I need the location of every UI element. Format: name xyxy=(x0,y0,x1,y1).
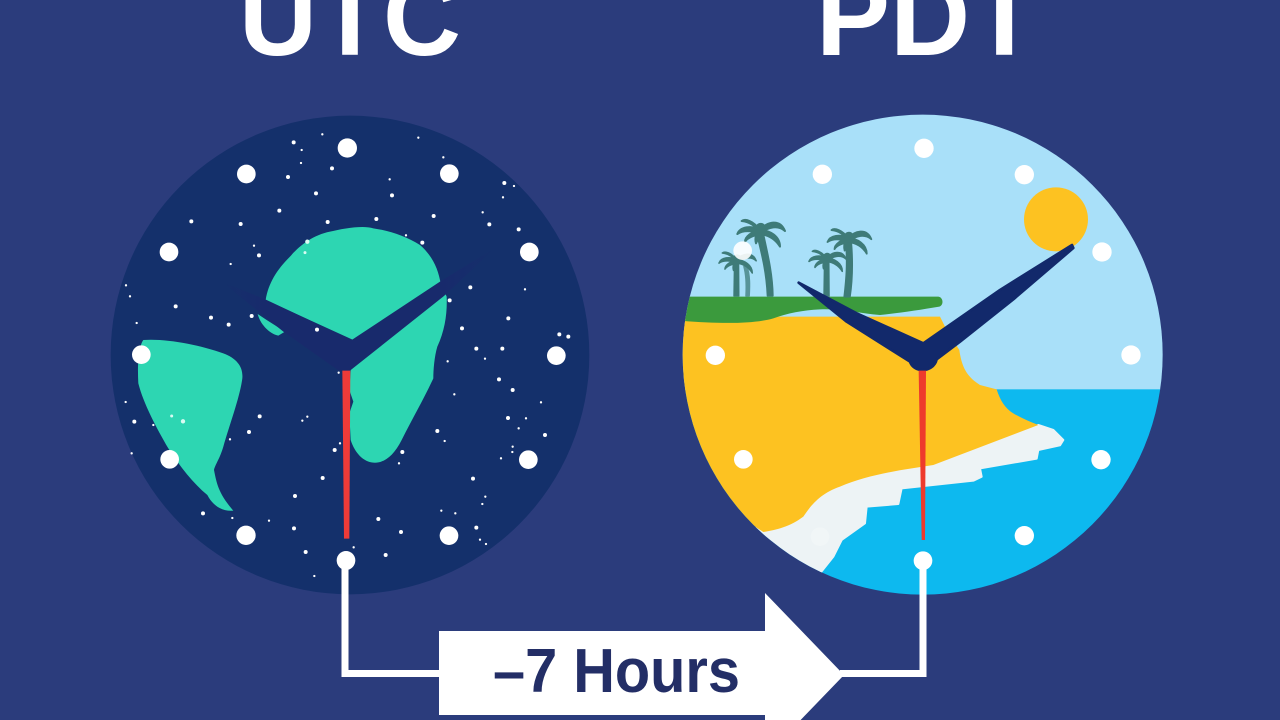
grass xyxy=(680,297,942,323)
stars over continents xyxy=(172,242,307,421)
clock face: night sky xyxy=(111,116,589,594)
palm: small right xyxy=(809,251,846,296)
connector: arrow to PDT clock xyxy=(840,552,932,674)
tick marks xyxy=(132,138,566,570)
arrow: minus seven hours xyxy=(439,593,844,720)
continent: small island xyxy=(258,314,285,336)
palm: tall right xyxy=(827,229,871,297)
sea xyxy=(680,389,1167,596)
icon: stars xyxy=(126,134,568,576)
arrow label: –7 Hours xyxy=(493,637,740,706)
tick marks xyxy=(706,139,1141,570)
sand cliff xyxy=(680,317,1038,532)
palm: tall left xyxy=(737,220,785,296)
sky xyxy=(680,113,1167,390)
connector: UTC clock to arrow xyxy=(337,552,445,674)
beach foam xyxy=(747,425,1063,573)
second hand xyxy=(342,371,350,539)
continent: north xyxy=(266,227,447,463)
star on hour hand xyxy=(315,328,319,332)
palm trees xyxy=(719,220,871,297)
clock: PDT beach scene xyxy=(680,113,1167,596)
palm: small left xyxy=(719,252,756,296)
continent: south america xyxy=(138,340,242,511)
clock face scene xyxy=(680,113,1167,596)
second hand xyxy=(919,371,926,540)
sun xyxy=(1024,187,1088,251)
clock hands: hour and minute xyxy=(799,245,1073,370)
clock hands: hour and minute xyxy=(222,247,497,371)
clock: UTC globe at night xyxy=(111,116,589,594)
